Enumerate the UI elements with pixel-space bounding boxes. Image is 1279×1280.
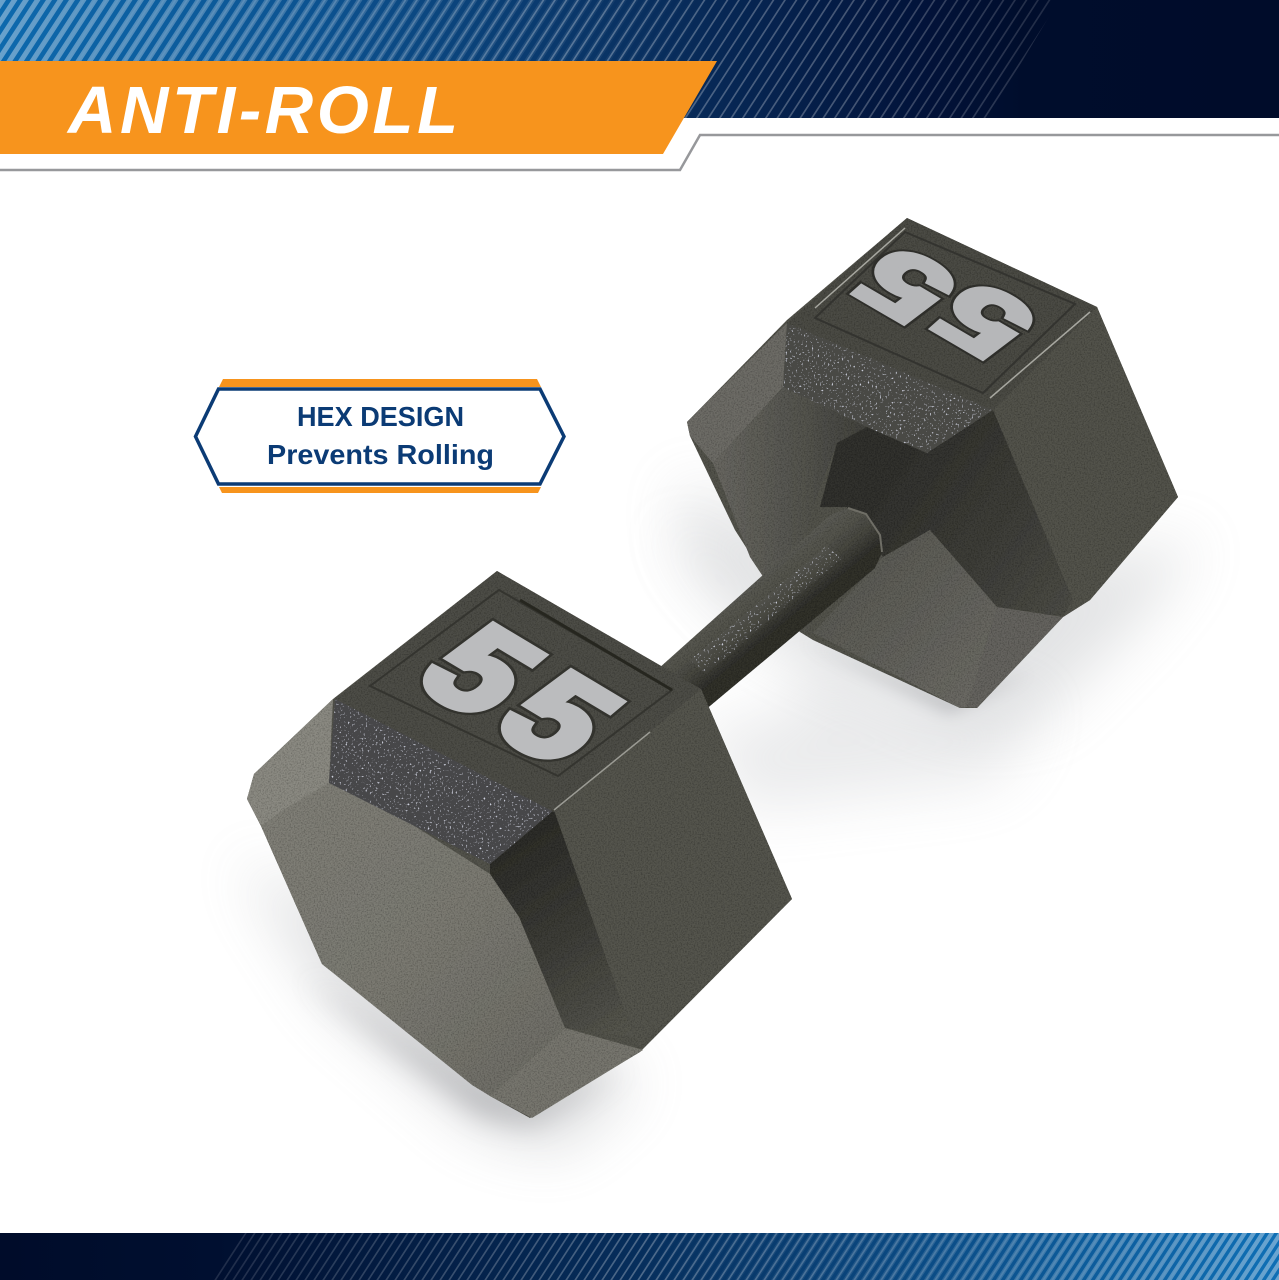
header outline bbox=[0, 135, 1279, 170]
callout text: Prevents Rolling bbox=[267, 439, 494, 470]
footer band bbox=[0, 1233, 1279, 1280]
front head top face bbox=[335, 571, 701, 812]
front head upper chamfer bbox=[247, 699, 333, 826]
back head number: 55 bbox=[831, 223, 1058, 383]
front hex head bbox=[247, 571, 792, 1118]
handle bbox=[639, 508, 882, 726]
back head lower face bbox=[813, 530, 997, 708]
front head shaded chamfer bbox=[490, 810, 634, 1037]
title banner bbox=[0, 61, 717, 154]
back head silhouette bbox=[687, 218, 1178, 708]
front head number: 55 bbox=[389, 601, 651, 787]
front head inset frame bbox=[370, 590, 672, 776]
front head end face bbox=[261, 783, 565, 1096]
title: ANTI-ROLL bbox=[66, 73, 458, 148]
back head end face bbox=[713, 387, 867, 633]
header band bbox=[0, 0, 1279, 118]
callout: hex design bbox=[196, 379, 564, 493]
back head right face bbox=[993, 307, 1178, 617]
back head top chamfer band bbox=[783, 323, 993, 453]
back head number: 55 bbox=[831, 223, 1058, 383]
front head silhouette bbox=[247, 571, 792, 1118]
back head lower chamfer bbox=[967, 607, 1063, 708]
callout heading: HEX DESIGN bbox=[297, 401, 464, 432]
floor shadows bbox=[240, 480, 1200, 1150]
back head light end chamfer bbox=[687, 323, 787, 463]
dumbbell bbox=[247, 218, 1178, 1118]
back head shaded recess bbox=[820, 410, 1073, 617]
front head glitter band bbox=[329, 699, 554, 864]
back head inset frame bbox=[815, 232, 1075, 393]
front head bottom chamfer bbox=[490, 1028, 643, 1118]
back hex head bbox=[687, 218, 1178, 708]
front head right face bbox=[554, 689, 792, 1046]
back head top face bbox=[787, 218, 1097, 410]
front head number: 55 bbox=[389, 601, 651, 787]
